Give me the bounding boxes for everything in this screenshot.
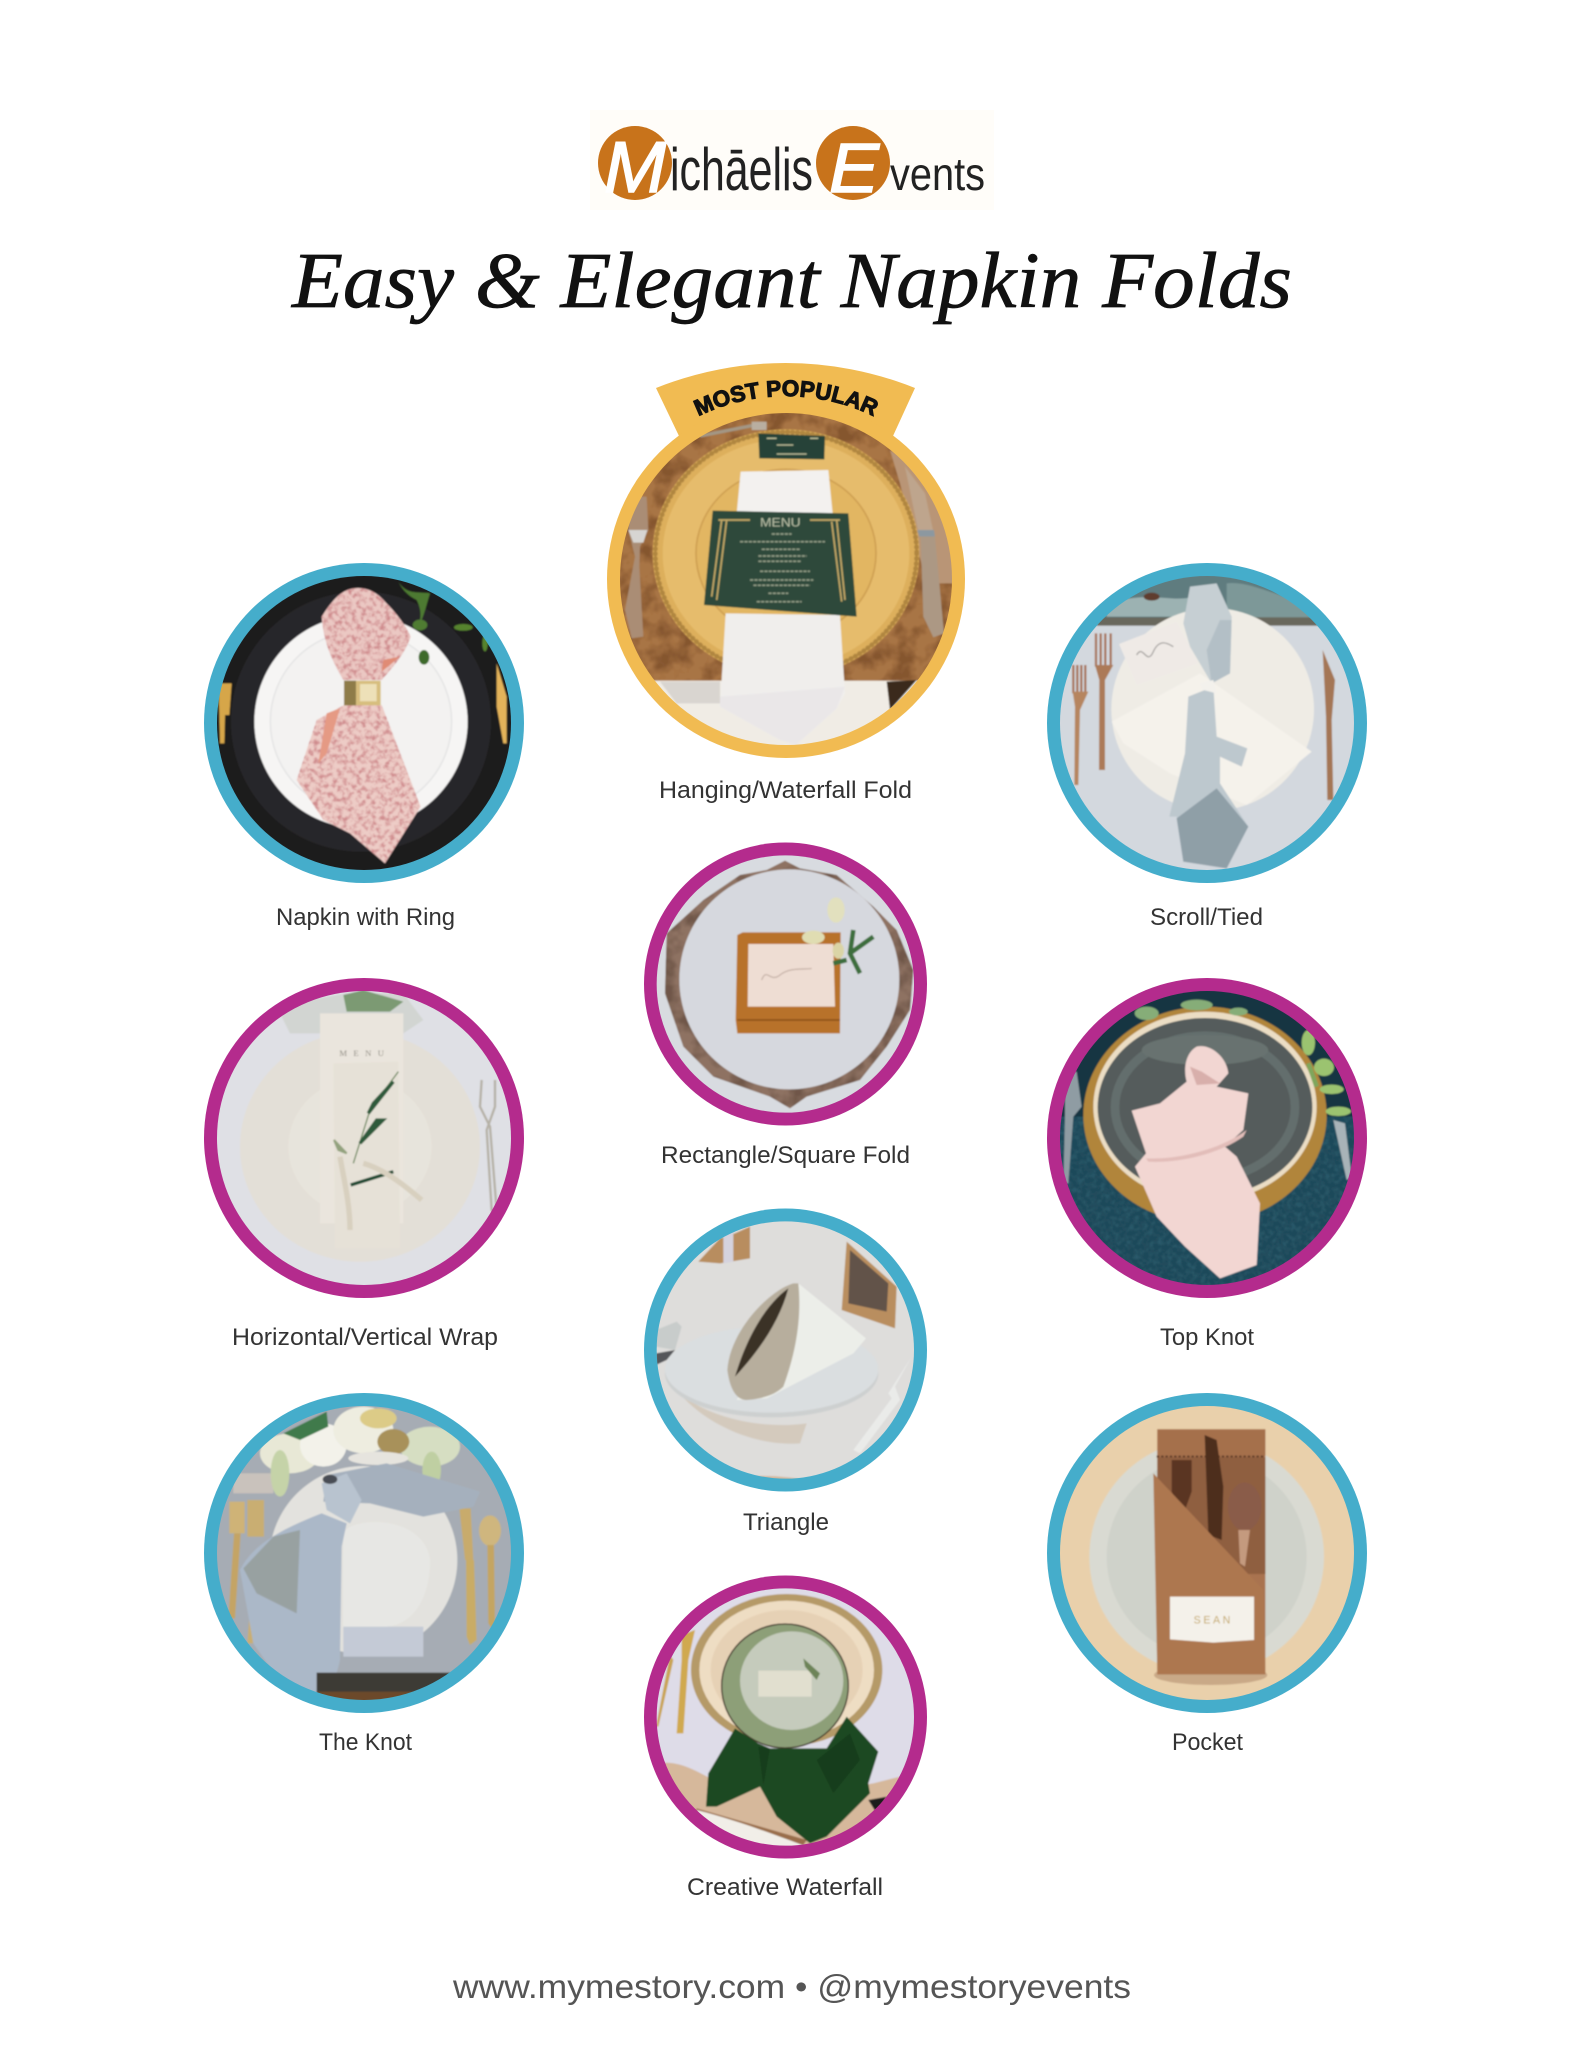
label: Top Knot <box>1160 1324 1254 1351</box>
photo: pink napkin with gold ring <box>217 576 511 870</box>
logo word ichaelis: ichāelis <box>670 136 813 203</box>
photo: blue-grey knotted napkin with flowers <box>217 1406 511 1700</box>
panel: creative waterfall <box>644 1576 927 1901</box>
most popular banner <box>656 363 915 436</box>
panel: top knot <box>1047 978 1367 1351</box>
label: Scroll/Tied <box>1150 904 1263 931</box>
label: Triangle <box>743 1509 829 1536</box>
panel: horizontal vertical wrap <box>204 978 524 1351</box>
label: Rectangle/Square Fold <box>661 1142 910 1169</box>
label: Pocket <box>1172 1729 1243 1756</box>
photo: wrapped white napkin with sprig <box>217 991 511 1285</box>
logo: Michaelis Events <box>590 110 994 210</box>
photo: green napkin under green plate <box>653 1587 920 1853</box>
label: Creative Waterfall <box>687 1874 883 1901</box>
photo: brown pocket fold with cutlery <box>1060 1406 1354 1700</box>
teal ring <box>204 1393 524 1713</box>
panel: the knot <box>204 1393 524 1756</box>
panel: scroll tied <box>1047 563 1367 931</box>
label: Hanging/Waterfall Fold <box>659 777 912 804</box>
teal ring <box>1047 563 1367 883</box>
photo: wrapped white napkin with sprig: MENU <box>339 1048 385 1058</box>
gold ring <box>607 400 965 758</box>
photo: triangle folded napkin on plate <box>653 1220 920 1487</box>
label: Napkin with Ring <box>276 904 455 931</box>
label: Horizontal/Vertical Wrap <box>232 1324 498 1351</box>
logo letter E: E <box>829 129 880 207</box>
panel: pocket <box>1047 1393 1367 1756</box>
logo letter M: M <box>604 128 666 208</box>
panel: rectangle square fold <box>644 842 927 1169</box>
logo word vents: vents <box>890 148 985 200</box>
photo: gold charger with green menu: MENU <box>760 516 801 530</box>
logo circle M <box>598 126 672 200</box>
photo: pink top knot on grey and gold plate <box>1060 991 1354 1285</box>
logo circle E <box>816 126 890 200</box>
panel: triangle <box>644 1208 927 1536</box>
photo: orange napkin on white plate <box>653 853 920 1120</box>
magenta ring <box>1047 978 1367 1298</box>
magenta ring <box>204 978 524 1298</box>
panel: napkin with ring <box>204 563 524 931</box>
label: The Knot <box>319 1729 412 1756</box>
magenta ring <box>644 842 927 1126</box>
magenta ring <box>644 1576 927 1858</box>
photo: gold charger with green menu <box>613 410 960 754</box>
teal ring <box>1047 1393 1367 1713</box>
teal ring <box>204 563 524 883</box>
title: Easy & Elegant Napkin Folds <box>291 238 1292 325</box>
photo: grey napkin tied on white plate <box>1060 576 1354 870</box>
footer: www.mymestory.com • @mymestoryevents <box>452 1968 1131 2005</box>
banner label: MOST POPULAR <box>692 380 878 417</box>
teal ring <box>644 1208 927 1492</box>
photo: brown pocket fold with cutlery: SEAN <box>1194 1614 1230 1626</box>
panel: hanging waterfall fold <box>607 363 965 804</box>
